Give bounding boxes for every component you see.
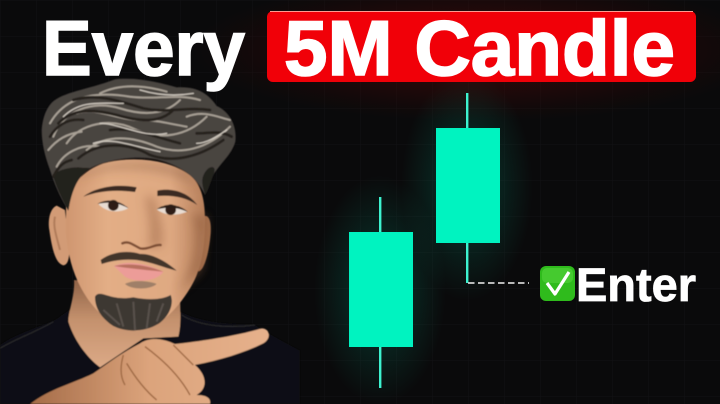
beard (95, 294, 172, 331)
right candlestick (436, 93, 500, 283)
title word: Every: Every (42, 4, 245, 92)
dashed entry line (468, 282, 529, 284)
red glow behind title (190, 0, 720, 122)
pointing hand (30, 328, 269, 404)
left candlestick (349, 197, 413, 388)
mustache (101, 252, 177, 271)
title badge: 5M Candle: 5M Candle (284, 4, 675, 92)
face shading (77, 162, 207, 293)
face (66, 159, 205, 331)
icon: green check mark (540, 266, 575, 301)
hair (42, 79, 236, 211)
eyebrows (83, 186, 197, 205)
shirt (0, 308, 300, 404)
person portrait (0, 79, 300, 404)
lips (114, 263, 163, 281)
eyes (97, 200, 188, 215)
nose (122, 242, 161, 249)
label: Enter: Enter (576, 258, 696, 311)
candlestick glow (314, 71, 533, 404)
neck (68, 280, 180, 367)
ears (49, 206, 211, 272)
